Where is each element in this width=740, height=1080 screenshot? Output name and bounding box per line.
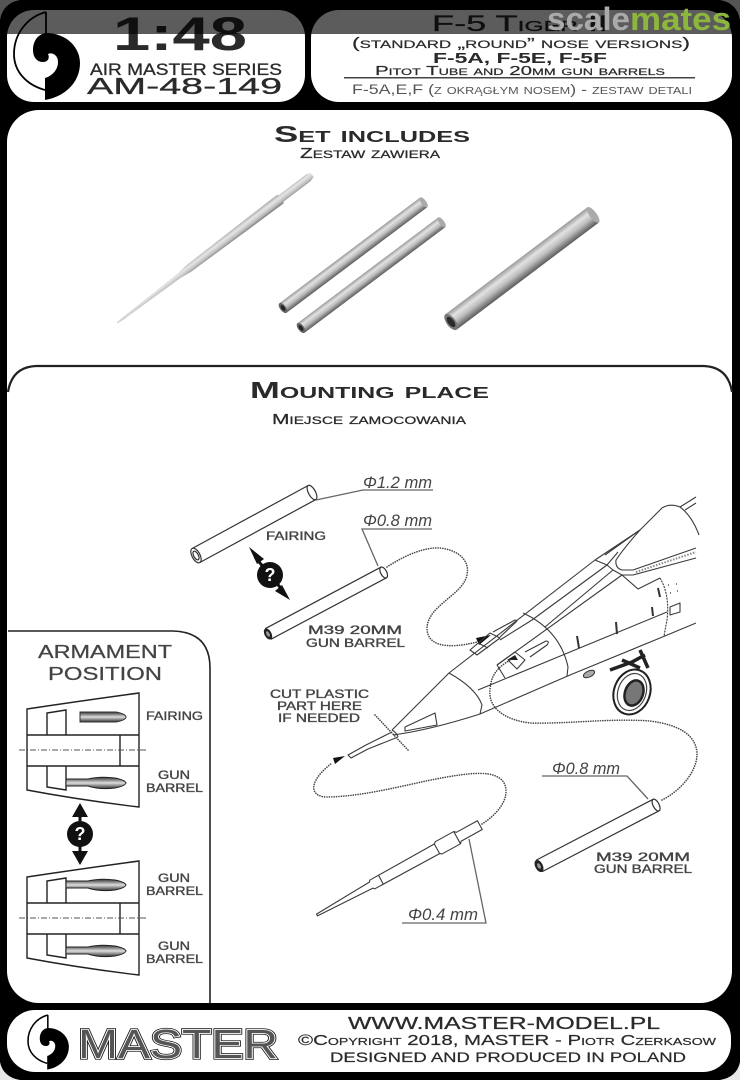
icon: question arrow — [67, 803, 93, 865]
product code: AM-48-149 — [87, 73, 282, 99]
aircraft nose drawing — [348, 497, 699, 758]
part: pitot tube — [114, 171, 315, 327]
wing diagram: fairing and barrel — [19, 693, 148, 807]
aircraft name: F-5 Tiger II — [432, 11, 608, 36]
dimension: 0.8 mm — [542, 759, 648, 799]
radome window — [405, 713, 437, 731]
wing diagram: two barrels — [19, 861, 148, 975]
dimension: 0.4 mm — [402, 839, 486, 924]
series name: AIR MASTER SERIES — [90, 60, 282, 79]
scale title: 1:48 — [113, 7, 247, 60]
logo wordmark: MASTER — [78, 1021, 278, 1067]
watermark: scalemates logo: scale — [547, 1, 630, 37]
label: gun barrel — [146, 770, 204, 795]
label: lower gun barrel: GUN — [158, 941, 190, 953]
dimension: 1.2 mm: Φ1.2 mm — [363, 473, 432, 492]
icon: Master swirl logo — [14, 12, 80, 100]
icon: fairing — [80, 712, 126, 722]
label: cut plastic: IF NEEDED — [278, 713, 360, 725]
part: fairing tube — [442, 205, 602, 332]
dimension: 0.8 mm: Φ0.8 mm — [552, 759, 620, 778]
icon: question arrow: ? — [74, 824, 86, 844]
fuselage outline — [392, 505, 699, 730]
gun bays — [470, 620, 548, 678]
pitot tube drawing — [314, 819, 486, 924]
label: gun barrel: M39 20MM — [596, 852, 690, 864]
label: upper gun barrel: BARREL — [146, 886, 204, 898]
logo wordmark: MASTER — [78, 1021, 278, 1067]
part: barrel 2 — [295, 216, 447, 335]
watermark: scalemates logo: mates — [630, 1, 731, 37]
nose wheel — [582, 650, 657, 720]
panel: armament position — [8, 631, 210, 1003]
label: gun barrel: GUN BARREL — [306, 638, 406, 650]
icon: upper gun barrel — [66, 879, 126, 891]
label: cut plastic: PART HERE — [277, 701, 362, 713]
label: gun barrel: GUN BARREL — [594, 864, 693, 876]
panel arcs — [449, 673, 482, 714]
dimension: 0.8 mm: Φ0.8 mm — [363, 511, 432, 530]
icon: question arrow — [249, 547, 290, 600]
label: upper gun barrel: GUN — [158, 873, 190, 885]
watermark band — [0, 0, 740, 34]
label: fairing: FAIRING — [146, 711, 203, 723]
dotted path: pitot tube to nose — [314, 756, 506, 824]
heading: zestaw zawiera: Zestaw zawiera — [300, 145, 441, 162]
part: barrel 1 — [277, 196, 429, 315]
dotted path: upper gun barrel to fuselage — [387, 548, 491, 646]
version note: (standard „round” nose versions) — [352, 35, 690, 52]
label: cut plastic — [270, 689, 369, 725]
dimension: 1.2 mm — [316, 473, 433, 500]
label: gun barrel — [306, 625, 406, 650]
pitot probe stub — [348, 732, 398, 758]
dimension: 0.4 mm: Φ0.4 mm — [408, 905, 478, 924]
gun barrel drawing — [262, 511, 432, 650]
label: cut plastic: CUT PLASTIC — [270, 689, 369, 701]
label: lower gun barrel: BARREL — [146, 954, 204, 966]
heading: mounting place: Mounting place — [250, 377, 489, 403]
fairing tube drawing — [189, 473, 433, 564]
label: gun barrel — [594, 852, 693, 876]
contents line: Pitot Tube and 20mm gun barrels — [375, 63, 665, 78]
label: lower gun barrel — [146, 941, 204, 966]
dotted path: lower gun barrel to fuselage — [490, 660, 697, 800]
cut line — [375, 715, 408, 750]
heading: armament position: ARMAMENT — [38, 642, 172, 662]
lower gun barrel drawing — [533, 759, 693, 876]
spine lines — [497, 530, 640, 665]
panel marks — [577, 588, 660, 648]
heading: armament position: POSITION — [48, 664, 162, 684]
canopy — [616, 530, 696, 575]
icon: gun barrel — [66, 777, 126, 789]
label: gun barrel: GUN — [158, 770, 190, 782]
website: WWW.MASTER-MODEL.PL — [348, 1013, 660, 1033]
designed in poland: DESIGNED AND PRODUCED IN POLAND — [330, 1049, 686, 1065]
label: gun barrel: M39 20MM — [308, 625, 402, 637]
icon: footer swirl logo — [28, 1015, 69, 1070]
label: gun barrel: BARREL — [146, 783, 204, 795]
panel: footer — [7, 1010, 731, 1072]
watermark: scalemates logo — [547, 1, 731, 37]
versions: F-5A, F-5E, F-5F — [433, 51, 607, 67]
panel: mounting place — [8, 366, 732, 428]
icon: question arrow: ? — [264, 565, 276, 585]
panel: scale and series — [7, 7, 305, 102]
heading: set includes: Set includes — [274, 121, 471, 147]
copyright: ©Copyright 2018, MASTER - Piotr Czerkasow — [298, 1033, 717, 1049]
panel: product title — [311, 10, 732, 102]
heading: armament position — [38, 642, 172, 684]
label: upper gun barrel — [146, 873, 204, 898]
heading: miejsce zamocowania: Miejsce zamocowania — [272, 411, 467, 428]
polish description: F-5A,E,F (z okrągłym nosem) - zestaw detali — [352, 81, 692, 97]
dimension: 0.8 mm — [362, 511, 432, 566]
logo wordmark: MASTER — [78, 1021, 278, 1067]
panel: set includes — [114, 121, 602, 335]
label: fairing: FAIRING — [266, 531, 326, 543]
icon: lower gun barrel — [66, 945, 126, 957]
